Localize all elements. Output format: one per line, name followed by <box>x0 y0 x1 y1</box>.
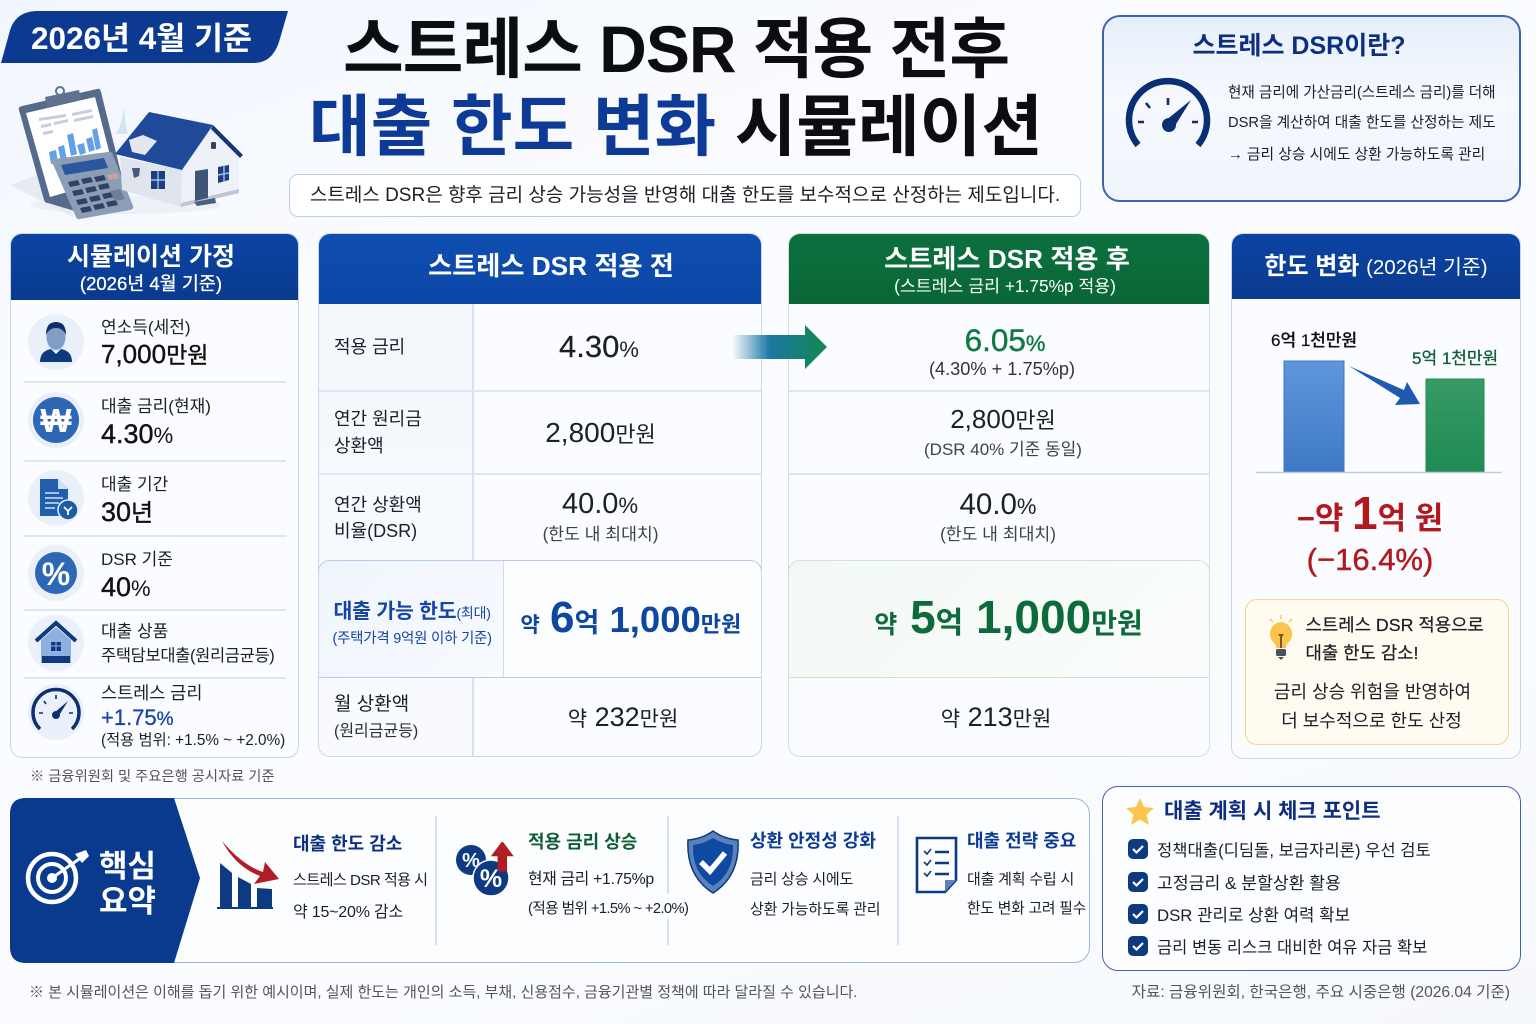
illustration: clipboard, calculator and house <box>10 86 243 220</box>
checklist item 2: 고정금리 & 분할상환 활용 <box>1157 873 1341 893</box>
row: 대출 가능 한도 <box>318 560 762 678</box>
item: 대출 한도 감소: 약 15~20% 감소 <box>293 904 403 921</box>
icon: percent <box>28 545 84 601</box>
panel: 스트레스 DSR 적용 전 <box>318 233 762 757</box>
row: 적용 금리 후 <box>929 322 1075 379</box>
row: 월 상환액: (원리금균등) <box>334 723 418 740</box>
row: 대출 가능 한도 후 <box>788 560 1210 678</box>
bar chart <box>1256 331 1502 474</box>
badge: 2026년 4월 기준: 2026년 4월 기준 <box>31 20 252 56</box>
checklist item 1: 정책대출(디딤돌, 보금자리론) 우선 검토 <box>1157 840 1431 860</box>
row: 연간 원리금 상환액: 연간 원리금 <box>334 409 422 429</box>
panel: 대출 계획 시 체크 포인트 <box>1102 786 1521 971</box>
footnote: source: 자료: 금융위원회, 한국은행, 주요 시중은행 (2026.04 기준) <box>1132 984 1510 1001</box>
panel: 시뮬레이션 가정: DSR 기준 <box>101 550 173 569</box>
panel: 스트레스 DSR이란? <box>1102 15 1521 202</box>
icon: target <box>26 850 89 904</box>
panel: 시뮬레이션 가정 <box>10 233 299 758</box>
icon: person <box>28 314 84 370</box>
header: 적용 후: (스트레스 금리 +1.75%p 적용) <box>894 276 1116 296</box>
item: 상환 안정성 강화: 금리 상승 시에도 <box>750 871 853 888</box>
row: 적용 금리 후: (4.30% + 1.75%p) <box>929 359 1075 379</box>
row: 월 상환액 <box>334 694 678 740</box>
item: 대출 전략 중요: 대출 계획 수립 시 <box>967 871 1074 888</box>
icon: light bulb <box>1270 615 1292 660</box>
row: 연간 상환액 비율: (한도 내 최대치) <box>543 524 658 544</box>
footnote: disclaimer: ※ 본 시뮬레이션은 이해를 돕기 위한 예시이며, 실제 한도는 개인의 소득, 부채, 신용점수, 금융기관별 정책에 따라 달라질 수 있습니다. <box>29 984 857 1001</box>
callout: 한도 감소 <box>1244 598 1508 744</box>
callout: 한도 감소: 더 보수적으로 한도 산정 <box>1281 710 1462 730</box>
item: 적용 금리 상승: (적용 범위 +1.5% ~ +2.0%) <box>528 901 688 917</box>
panel: 시뮬레이션 가정: 연소득(세전) <box>101 318 191 337</box>
banner: 핵심 요약: 핵심 <box>99 848 156 884</box>
header: 한도 변화: 한도 변화 (2026년 기준) <box>1264 252 1488 280</box>
panel: 시뮬레이션 가정: 대출 상품 <box>101 622 168 641</box>
callout: 한도 감소: 스트레스 DSR 적용으로 <box>1306 614 1484 634</box>
row: 원리금 후: (DSR 40% 기준 동일) <box>924 440 1082 459</box>
item: 상환 안정성 강화: 상환 안정성 강화 <box>750 831 876 851</box>
header: 적용 전 <box>317 232 763 304</box>
row: 연간 원리금 상환액: 상환액 <box>334 436 384 456</box>
row: 원리금 후: 2,800만원 <box>950 404 1056 434</box>
arrow: before to after <box>734 325 827 369</box>
title: 대출 한도 변화 시뮬레이션 <box>309 90 1043 165</box>
title: 스트레스 DSR 적용 전후 <box>343 12 1009 86</box>
item: 상환 안정성 강화: 상환 가능하도록 관리 <box>750 901 880 918</box>
panel: 대출 계획 시 체크 포인트: 대출 계획 시 체크 포인트 <box>1164 800 1381 823</box>
icon: gauge <box>1126 78 1210 148</box>
result: 약 1억 원 감소 <box>1297 487 1443 577</box>
row: 적용 금리 <box>334 329 639 364</box>
item: 적용 금리 상승: 적용 금리 상승 <box>528 832 637 852</box>
row: 대출 가능 한도: 대출 가능 한도(최대) <box>334 600 491 623</box>
subtitle box: 스트레스 DSR은 향후 금리 상승 가능성을 반영해 대출 한도를 보수적으로 산정하는 제도입니다. <box>310 185 1060 206</box>
panel: 스트레스 DSR 적용 후 <box>788 233 1210 757</box>
item: 대출 한도 감소 <box>217 834 428 921</box>
item: 대출 한도 감소: 스트레스 DSR 적용 시 <box>293 872 428 889</box>
row: 대출 가능 한도 후: 약 5억 1,000만원 <box>874 591 1143 643</box>
callout: 한도 감소: 금리 상승 위험을 반영하여 <box>1274 682 1471 702</box>
result: 약 1억 원 감소: (−16.4%) <box>1307 542 1433 577</box>
header: 시뮬레이션 가정: 시뮬레이션 가정 <box>67 243 235 271</box>
bar chart: 6억 1천만원 <box>1271 331 1357 350</box>
icon: won coin <box>28 392 84 448</box>
row: DSR 후: (한도 내 최대치) <box>940 524 1056 544</box>
row: 월 상환액: 월 상환액 <box>334 694 409 715</box>
panel: 스트레스 DSR이란?: DSR을 계산하여 대출 한도를 산정하는 제도 <box>1228 114 1496 130</box>
item: 대출 전략 중요: 한도 변화 고려 필수 <box>967 901 1086 917</box>
row: 적용 금리: 4.30% <box>559 329 639 364</box>
item: 대출 전략 중요 <box>916 831 1086 917</box>
row: DSR 후: 40.0% <box>960 488 1036 521</box>
panel: 시뮬레이션 가정: 주택담보대출(원리금균등) <box>101 647 274 665</box>
panel: 시뮬레이션 가정: (적용 범위: +1.5% ~ +2.0%) <box>101 732 285 749</box>
icon: checklist <box>916 836 958 894</box>
panel: 시뮬레이션 가정: 4.30% <box>101 419 173 449</box>
header: 적용 후: 스트레스 DSR 적용 후 <box>884 244 1130 274</box>
panel: 스트레스 DSR이란?: 현재 금리에 가산금리(스트레스 금리)를 더해 <box>1228 84 1496 100</box>
icon: house <box>28 615 84 671</box>
row: 월 상환액 후: 약 213만원 <box>941 702 1051 732</box>
icon: percent coins: % <box>462 850 480 872</box>
panel: 시뮬레이션 가정: 대출 기간 <box>101 475 168 494</box>
row: 연간 원리금 상환액 <box>334 409 656 456</box>
icon: shield <box>687 830 739 894</box>
panel: 시뮬레이션 가정: 스트레스 금리 <box>101 683 202 703</box>
row: 연간 상환액 비율: 연간 상환액 <box>334 495 422 515</box>
row: DSR 후 <box>940 488 1056 544</box>
header: 시뮬레이션 가정: (2026년 4월 기준) <box>80 273 222 294</box>
panel: 시뮬레이션 가정: 30년 <box>101 497 153 527</box>
subtitle box <box>289 174 1081 217</box>
checklist item 3: DSR 관리로 상환 여력 확보 <box>1157 906 1350 924</box>
row: 적용 금리: 적용 금리 <box>334 337 405 357</box>
icon: percent coins: % <box>480 865 502 893</box>
icon: percent coins <box>456 842 514 896</box>
row: 연간 상환액 비율 <box>334 488 658 544</box>
row: 대출 가능 한도: (주택가격 9억원 이하 기준) <box>332 631 492 647</box>
banner: 핵심 요약 <box>10 798 200 963</box>
panel: 시뮬레이션 가정: 대출 금리(현재) <box>101 397 211 416</box>
icon: stress gauge <box>28 684 84 740</box>
row: 연간 상환액 비율: 비율(DSR) <box>334 521 417 541</box>
row: 연간 원리금 상환액: 2,800만원 <box>545 417 656 448</box>
banner: 핵심 요약: 요약 <box>99 884 156 918</box>
panel: 한도 변화 <box>1231 233 1521 759</box>
row: 원리금 후 <box>924 404 1082 459</box>
item: 상환 안정성 강화 <box>687 830 880 918</box>
icon: star <box>1126 798 1154 825</box>
panel: 시뮬레이션 가정: +1.75% <box>101 705 174 730</box>
row: 연간 상환액 비율: 40.0% <box>562 488 638 520</box>
item: 적용 금리 상승: 현재 금리 +1.75%p <box>528 871 654 888</box>
icon: won coin: ₩ <box>40 402 72 439</box>
panel: 시뮬레이션 가정: 7,000만원 <box>101 339 208 369</box>
callout: 한도 감소: 대출 한도 감소! <box>1306 642 1418 662</box>
icon: document <box>28 470 84 526</box>
row: 월 상환액: 약 232만원 <box>568 702 678 732</box>
header: 시뮬레이션 가정 <box>9 232 301 300</box>
result: 약 1억 원 감소: −약 1억 원 <box>1297 487 1443 539</box>
badge: 2026년 4월 기준 <box>1 11 288 63</box>
header: 적용 후 <box>787 232 1211 304</box>
title <box>309 12 1043 165</box>
bar chart: 5억 1천만원 <box>1412 349 1498 368</box>
item: 대출 한도 감소: 대출 한도 감소 <box>293 834 402 854</box>
header: 적용 전: 스트레스 DSR 적용 전 <box>428 251 674 281</box>
checklist item 4: 금리 변동 리스크 대비한 여유 자금 확보 <box>1157 938 1427 956</box>
item: 적용 금리 상승 <box>456 832 688 917</box>
note: 공시자료 기준: ※ 금융위원회 및 주요은행 공시자료 기준 <box>30 769 275 785</box>
panel: 스트레스 DSR이란?: → 금리 상승 시에도 상환 가능하도록 관리 <box>1228 146 1485 162</box>
panel: 스트레스 DSR이란?: 스트레스 DSR이란? <box>1192 32 1406 60</box>
header: 한도 변화 <box>1230 232 1522 299</box>
panel: 시뮬레이션 가정: 40% <box>101 572 151 602</box>
row: 적용 금리 후: 6.05% <box>965 322 1045 358</box>
icon: falling bars <box>217 841 279 909</box>
panel: 핵심 요약 <box>10 798 1090 963</box>
item: 대출 전략 중요: 대출 전략 중요 <box>967 831 1076 851</box>
row: 대출 가능 한도: 약 6억 1,000만원 <box>520 593 741 642</box>
icon: percent: % <box>42 556 70 592</box>
